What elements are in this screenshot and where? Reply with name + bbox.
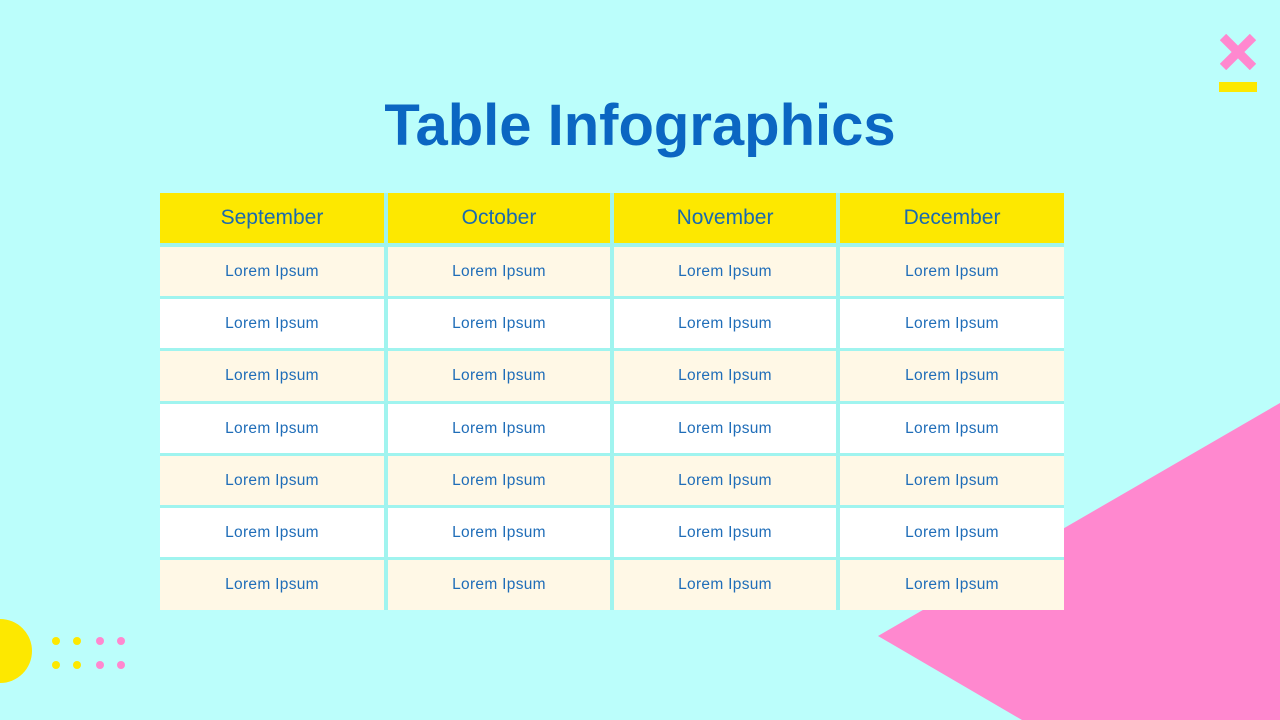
icon: pink x bbox=[1220, 34, 1256, 70]
table: Lorem Ipsum bbox=[905, 367, 999, 384]
table: Lorem Ipsum bbox=[678, 314, 772, 332]
table: Lorem Ipsum bbox=[905, 420, 999, 436]
table: Lorem Ipsum bbox=[225, 314, 319, 332]
header row: September bbox=[221, 206, 323, 229]
table: Lorem Ipsum bbox=[678, 472, 772, 488]
table: Lorem Ipsum bbox=[225, 367, 319, 384]
table: December bbox=[904, 206, 1000, 229]
table: Lorem Ipsum bbox=[452, 314, 546, 332]
table: Lorem Ipsum bbox=[678, 367, 772, 384]
table: Lorem Ipsum bbox=[678, 576, 772, 593]
header row bbox=[160, 193, 384, 243]
table: Lorem Ipsum bbox=[905, 472, 999, 488]
table: Lorem Ipsum bbox=[225, 262, 319, 280]
table: Lorem Ipsum bbox=[225, 472, 319, 488]
table: November bbox=[677, 206, 773, 229]
table: Lorem Ipsum bbox=[452, 367, 546, 384]
table: October bbox=[462, 206, 536, 229]
table bbox=[160, 193, 1064, 610]
table: Lorem Ipsum bbox=[905, 262, 999, 280]
title: Table Infographics bbox=[384, 93, 896, 158]
table: Lorem Ipsum bbox=[452, 420, 546, 436]
table: Lorem Ipsum bbox=[678, 420, 772, 436]
table: Lorem Ipsum bbox=[452, 472, 546, 488]
table: Lorem Ipsum bbox=[905, 524, 999, 540]
table: Lorem Ipsum bbox=[452, 524, 546, 540]
table: Lorem Ipsum bbox=[225, 524, 319, 540]
table: Lorem Ipsum bbox=[452, 262, 546, 280]
table: Lorem Ipsum bbox=[452, 576, 546, 593]
table: Lorem Ipsum bbox=[225, 576, 319, 593]
dots bbox=[52, 637, 125, 669]
yellow circle bbox=[0, 619, 32, 683]
table: Lorem Ipsum bbox=[905, 576, 999, 593]
table: Lorem Ipsum bbox=[225, 420, 319, 436]
table: Lorem Ipsum bbox=[905, 314, 999, 332]
table: Lorem Ipsum bbox=[678, 524, 772, 540]
yellow bar bbox=[1219, 82, 1257, 92]
table: Lorem Ipsum bbox=[678, 262, 772, 280]
